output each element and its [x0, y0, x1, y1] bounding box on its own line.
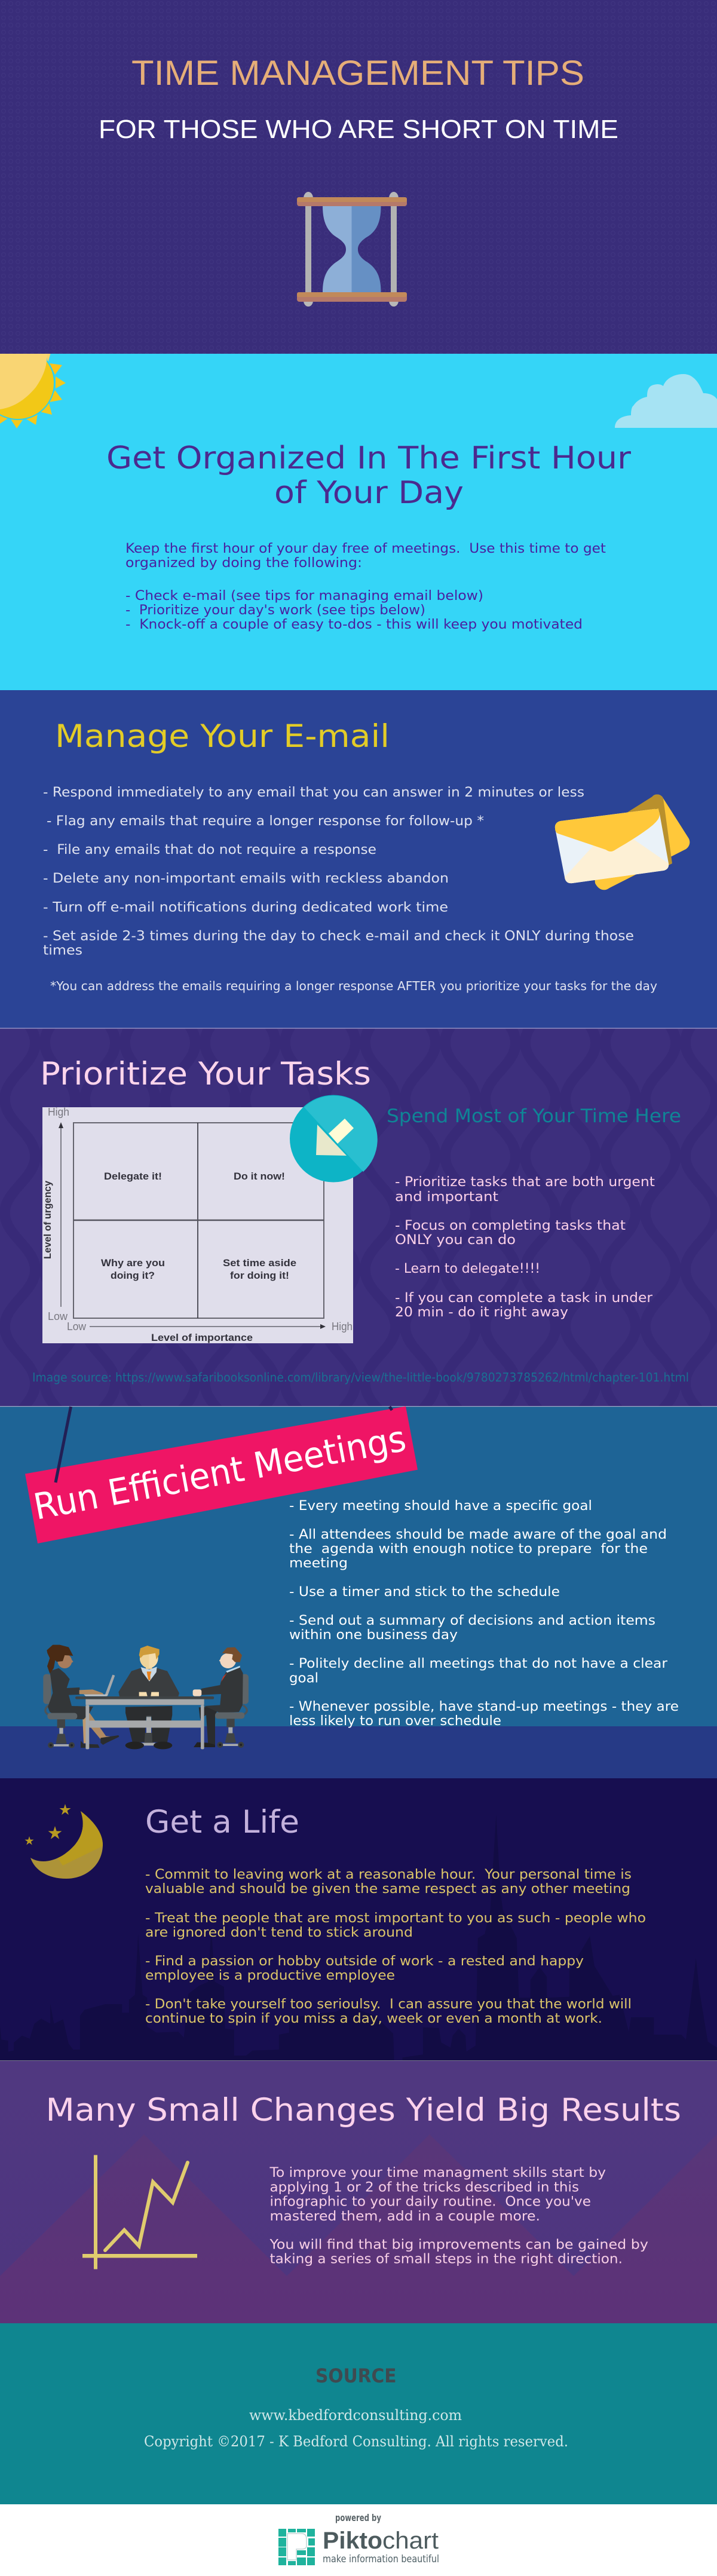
text block: email tips: - Delete any non-important emails with reckless abandon — [43, 871, 449, 886]
text block: life tips: - Find a passion or hobby outside of work - a rested and happy — [145, 1954, 584, 1969]
chart: urgency importance matrix: Low — [48, 1310, 68, 1322]
chart: urgency importance matrix: doing it? — [111, 1270, 155, 1281]
text block: life tips: employee is a productive employee — [145, 1968, 395, 1983]
text block: email tips — [43, 785, 657, 993]
chart: urgency importance matrix: Level of urgency — [42, 1180, 53, 1259]
chart: urgency importance matrix: for doing it! — [230, 1270, 289, 1281]
text block: closing advice — [269, 2165, 648, 2267]
text block: meeting tips: meeting — [289, 1556, 348, 1571]
text block: life tips — [145, 1867, 646, 2026]
chart: urgency importance matrix: Why are you — [101, 1257, 165, 1269]
heading: of Your Day — [274, 475, 464, 511]
panel: get organized — [0, 347, 717, 690]
icon: line chart — [82, 2155, 197, 2269]
chart: urgency importance matrix: Level of importance — [151, 1332, 253, 1343]
text block: closing advice: mastered them, add in a couple more. — [270, 2209, 540, 2224]
icon: cloud — [615, 374, 717, 428]
text block: meeting tips: goal — [289, 1671, 318, 1686]
text block: priority tips: ONLY you can do — [395, 1233, 516, 1248]
text block: first hour tips: Keep the first hour of your day free of meetings. Use this time to get — [125, 541, 606, 556]
text block: meeting tips: less likely to run over schedule — [289, 1714, 501, 1729]
text block: life tips: continue to spin if you miss a day, week or even a month at work. — [145, 2011, 602, 2026]
logo wordmark: chart — [382, 2528, 439, 2554]
panel: manage your e-mail — [0, 690, 717, 1028]
footnote: *You can address the emails requiring a longer response AFTER you prioritize your tasks for the day — [50, 979, 657, 993]
text block: priority tips: - Prioritize tasks that are both urgent — [395, 1175, 655, 1190]
logo wordmark — [323, 2528, 439, 2554]
text block: priority tips: 20 min - do it right away — [395, 1305, 568, 1320]
heading: Get Organized In The First Hour — [106, 440, 632, 476]
text block: first hour tips: organized by doing the following: — [125, 556, 362, 571]
text block: first hour tips: - Knock-off a couple of easy to-dos - this will keep you motivated — [125, 617, 583, 632]
panel: prioritize your tasks — [0, 1028, 717, 1407]
banner title: Run Efficient Meetings — [30, 1418, 409, 1529]
text block: email tips: - Respond immediately to any email that you can answer in 2 minutes or less — [43, 785, 584, 800]
chart: urgency importance matrix: Set time aside — [223, 1257, 296, 1269]
banner sign — [25, 1407, 418, 1543]
text block: email tips: - Turn off e-mail notifications during dedicated work time — [43, 900, 448, 915]
text block: meeting tips: - Politely decline all meetings that do not have a clear — [289, 1656, 668, 1671]
icon: envelopes — [555, 795, 690, 890]
text block: priority tips: - Learn to delegate!!!! — [395, 1261, 540, 1276]
text block: email tips: - Flag any emails that require a longer response for follow-up * — [47, 814, 484, 829]
text block: closing advice: applying 1 or 2 of the tricks described in this — [270, 2180, 579, 2195]
text block: meeting tips: - Use a timer and stick to the schedule — [289, 1585, 560, 1600]
text block: priority tips: - If you can complete a task in under — [395, 1291, 653, 1306]
text block: first hour tips: - Prioritize your day's work (see tips below) — [125, 603, 425, 618]
chart: urgency importance matrix — [42, 1106, 353, 1343]
website: www.kbedfordconsulting.com — [249, 2407, 462, 2424]
text block: closing advice: infographic to your daily routine. Once you've — [270, 2194, 591, 2210]
image source note: Image source: https://www.safaribooksonline.com/library/view/the-little-book/9780273785262/html/chapter-101.html — [32, 1370, 689, 1385]
text block: life tips: - Treat the people that are most important to you as such - people who — [145, 1911, 646, 1926]
subtitle: FOR THOSE WHO ARE SHORT ON TIME — [99, 115, 618, 144]
panel: title header — [0, 0, 717, 354]
source heading: SOURCE — [315, 2364, 397, 2387]
text block: priority tips: - Focus on completing tasks that — [395, 1218, 626, 1233]
text block: closing advice: To improve your time managment skills start by — [269, 2165, 606, 2180]
text block: meeting tips: - All attendees should be made aware of the goal and — [289, 1527, 667, 1542]
text block: meeting tips: - Send out a summary of decisions and action items — [289, 1613, 655, 1628]
panel: many small changes — [0, 2060, 717, 2323]
text block: priority tips: and important — [395, 1190, 498, 1205]
text block: email tips: - File any emails that do not require a response — [43, 843, 376, 857]
heading: Many Small Changes Yield Big Results — [45, 2092, 681, 2128]
text block: meeting tips: the agenda with enough notice to prepare for the — [289, 1542, 648, 1557]
heading: Prioritize Your Tasks — [40, 1056, 371, 1092]
copyright: Copyright ©2017 - K Bedford Consulting. All rights reserved. — [144, 2433, 568, 2450]
chart: urgency importance matrix: Delegate it! — [104, 1171, 162, 1182]
heading — [106, 440, 632, 511]
text block: closing advice: You will find that big improvements can be gained by — [269, 2237, 648, 2253]
text block: priority tips — [395, 1175, 655, 1320]
callout heading: Spend Most of Your Time Here — [387, 1105, 681, 1127]
text block: life tips: - Don't take yourself too serioulsy. I can assure you that the world will — [145, 1997, 632, 2012]
panel: source — [0, 2323, 717, 2504]
text block: life tips: are ignored don't tend to stick around — [145, 1925, 413, 1940]
text block: meeting tips: - Whenever possible, have stand-up meetings - they are — [289, 1699, 679, 1714]
title: TIME MANAGEMENT TIPS — [131, 54, 584, 93]
icon: sun — [0, 347, 66, 428]
icon: logo mark — [278, 2529, 315, 2565]
panel: get a life — [0, 1778, 717, 2060]
skyline silhouette — [0, 1815, 717, 2060]
text block: meeting tips: - Every meeting should have a specific goal — [289, 1499, 592, 1514]
chart: urgency importance matrix: High — [332, 1321, 353, 1333]
text block: closing advice: taking a series of small steps in the right direction. — [270, 2252, 623, 2267]
text block: life tips: valuable and should be given the same respect as any other meeting — [145, 1882, 630, 1897]
text block: email tips: times — [43, 943, 82, 958]
chart: urgency importance matrix: Do it now! — [234, 1171, 285, 1182]
panel: run efficient meetings — [0, 1406, 717, 1778]
chart: urgency importance matrix: High — [48, 1106, 69, 1118]
powered by: powered by — [335, 2512, 381, 2523]
icon: hourglass — [297, 192, 407, 307]
illustration: three people at a table — [43, 1645, 249, 1749]
logo wordmark: Pikto — [323, 2528, 382, 2554]
text block: meeting tips: within one business day — [289, 1628, 458, 1643]
heading: Manage Your E-mail — [55, 718, 390, 755]
text block: first hour tips — [125, 541, 606, 632]
text block: first hour tips: - Check e-mail (see tips for managing email below) — [125, 589, 483, 604]
icon: arrow badge — [290, 1095, 378, 1182]
icon: moon and stars — [24, 1804, 103, 1879]
chart: urgency importance matrix: Low — [67, 1321, 87, 1333]
panel: footer branding — [0, 2504, 717, 2576]
text block: meeting tips — [289, 1499, 679, 1729]
text block: email tips: - Set aside 2-3 times during the day to check e-mail and check it ONLY during those — [43, 929, 634, 944]
heading: Get a Life — [145, 1804, 299, 1840]
tagline: make information beautiful — [323, 2553, 439, 2565]
text block: life tips: - Commit to leaving work at a reasonable hour. Your personal time is — [145, 1867, 632, 1882]
